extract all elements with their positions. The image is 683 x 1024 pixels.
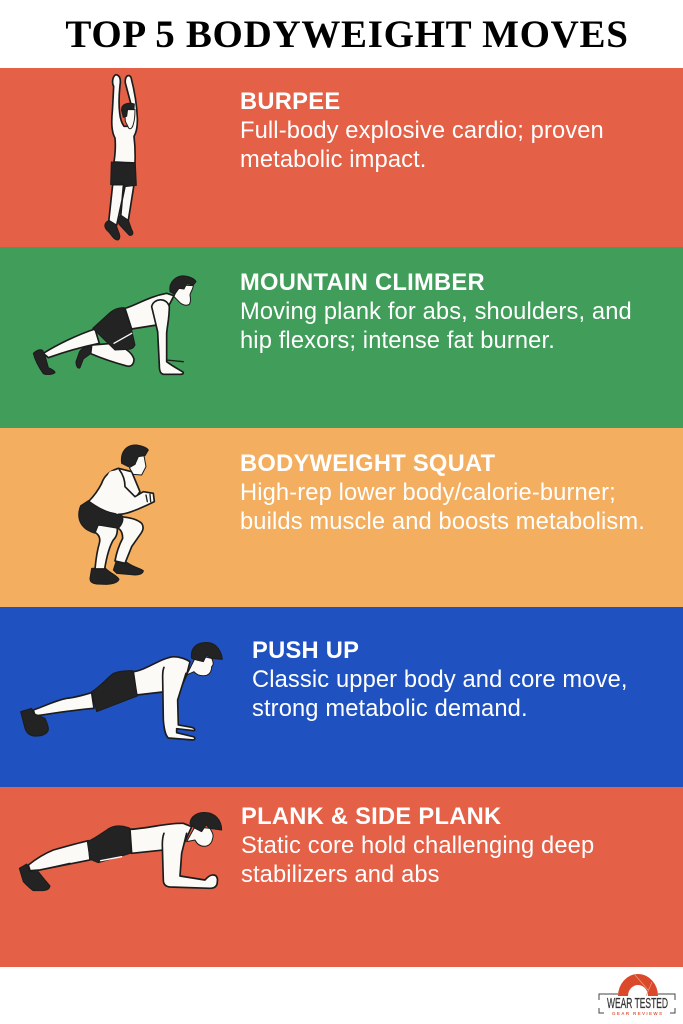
text: plank and side plank xyxy=(241,804,594,888)
text: plank and side plank: stabilizers and abs xyxy=(241,862,440,888)
title: TOP 5 BODYWEIGHT MOVES xyxy=(65,13,629,56)
text: mountain climber xyxy=(240,270,632,354)
text: burpee: metabolic impact. xyxy=(240,147,427,173)
text: push up: PUSH UP xyxy=(252,638,359,664)
logo: wear tested xyxy=(599,974,675,1016)
text: push up xyxy=(252,638,628,722)
text: plank and side plank: Static core hold challenging deep xyxy=(241,833,594,859)
icon: mountain climber figure xyxy=(33,276,196,375)
text: mountain climber: MOUNTAIN CLIMBER xyxy=(240,270,485,296)
text: bodyweight squat xyxy=(240,450,645,534)
panel: push up xyxy=(0,607,683,787)
text: mountain climber: Moving plank for abs, shoulders, and xyxy=(240,299,632,325)
panel: burpee xyxy=(0,68,683,247)
panel: plank and side plank xyxy=(0,787,683,967)
icon: burpee figure xyxy=(105,75,137,240)
text: bodyweight squat: High-rep lower body/calorie-burner; xyxy=(240,480,616,506)
text: plank and side plank: PLANK & SIDE PLANK xyxy=(241,804,501,830)
text: bodyweight squat: builds muscle and boosts metabolism. xyxy=(240,508,645,534)
text: push up: Classic upper body and core move, xyxy=(252,667,628,693)
icon: squat figure xyxy=(79,445,154,584)
text: bodyweight squat: BODYWEIGHT SQUAT xyxy=(240,450,495,476)
text: push up: strong metabolic demand. xyxy=(252,696,528,722)
logo: wear tested: GEAR REVIEWS xyxy=(612,1011,662,1016)
icon: plank figure xyxy=(19,813,222,891)
text: burpee: BURPEE xyxy=(240,89,340,115)
panel: mountain climber xyxy=(0,247,683,428)
text: burpee: Full-body explosive cardio; proven xyxy=(240,118,604,144)
text: mountain climber: hip flexors; intense fat burner. xyxy=(240,328,555,354)
panel: bodyweight squat xyxy=(0,428,683,607)
text: burpee xyxy=(240,89,604,173)
icon: push up figure xyxy=(21,643,222,740)
